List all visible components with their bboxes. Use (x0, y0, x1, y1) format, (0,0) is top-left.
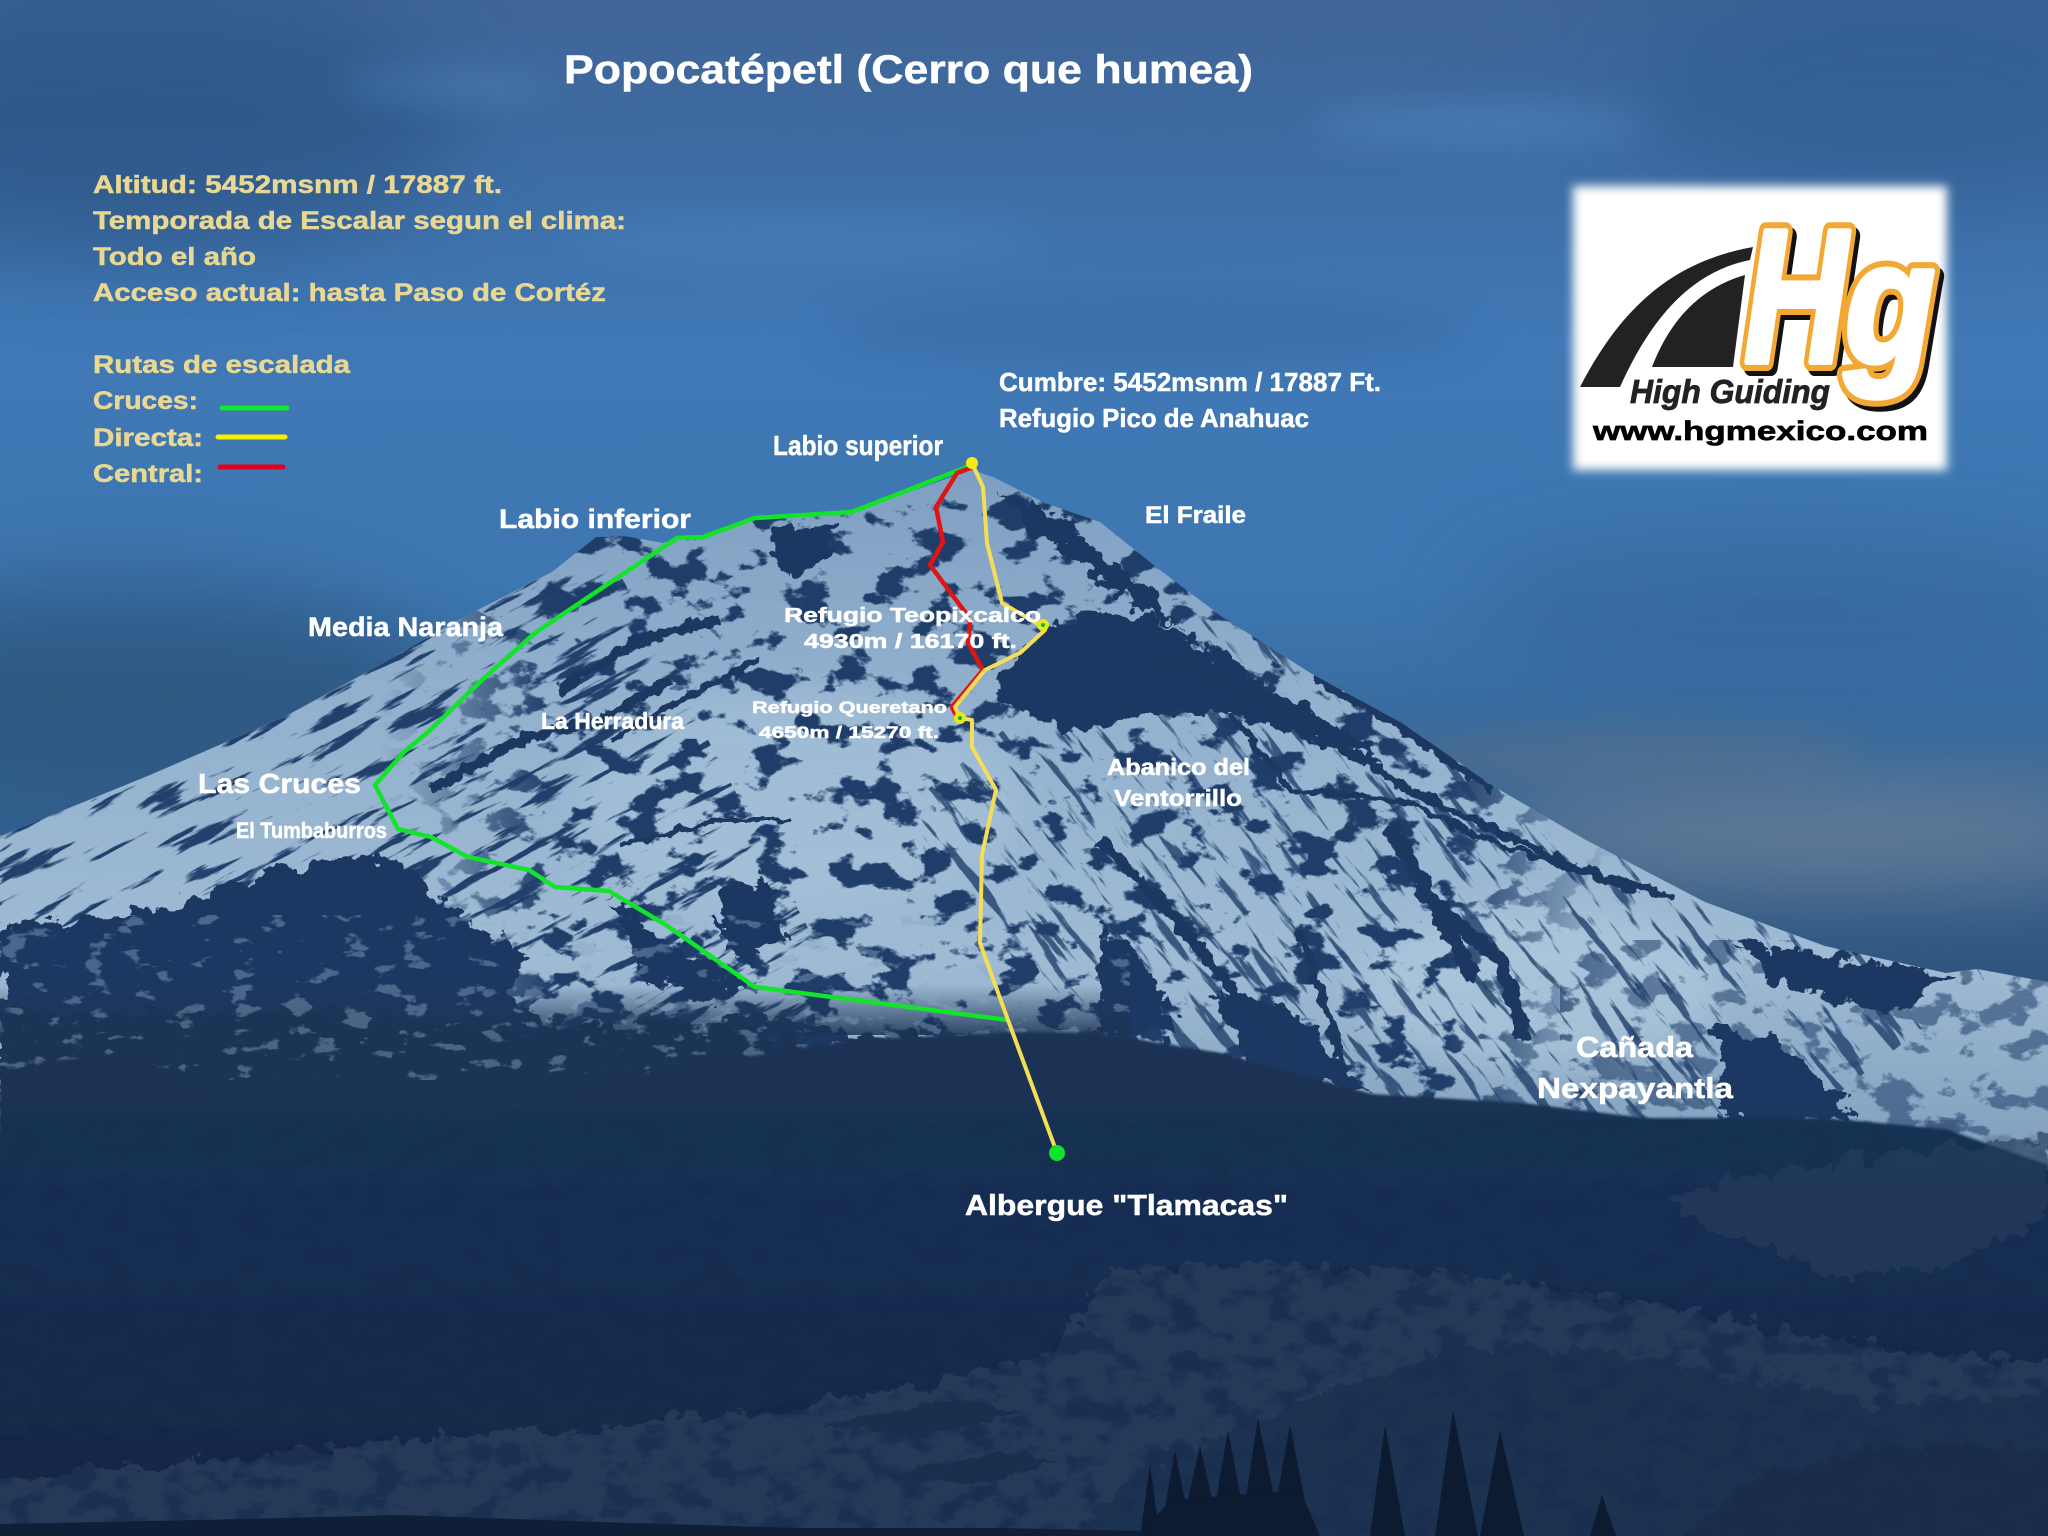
info block: altitude, season and access: Temporada de Escalar segun el clima: (93, 207, 626, 235)
forest band over the meadow (1030, 1345, 2048, 1536)
label: Refugio Teopixcalco (784, 605, 1041, 653)
foreground: forested hills (0, 1032, 2048, 1536)
rock texture: right slope (914, 610, 1984, 1119)
marker: summit (966, 457, 978, 469)
label: El Fraile: El Fraile (1145, 502, 1246, 529)
marker: Refugio Teopixcalco (1037, 619, 1049, 631)
forest grain (0, 1120, 2048, 1536)
marker: Albergue Tlamacas (1049, 1145, 1065, 1161)
label: Las Cruces: Las Cruces (198, 768, 361, 799)
info block: altitude, season and access: Acceso actual: hasta Paso de Cortéz (93, 279, 606, 307)
label: Abanico del Ventorrillo (1107, 754, 1250, 811)
label: Albergue Tlamacas: Albergue "Tlamacas" (965, 1190, 1288, 1222)
label: La Herradura: La Herradura (541, 708, 684, 734)
light flecks on the dark base (0, 915, 1130, 1080)
label: Cañada Nexpayantla: Nexpayantla (1537, 1073, 1734, 1105)
label: summit: Cumbre: 5452msnm / 17887 Ft. (999, 367, 1381, 397)
label: Labio superior: Labio superior (773, 430, 943, 461)
logo: High Guiding: H (1748, 196, 1854, 408)
label: Refugio Teopixcalco: 4930m / 16170 ft. (804, 631, 1017, 653)
logo: High Guiding: g (1844, 207, 1935, 399)
route: Directa (yellow) (955, 463, 1057, 1153)
legend: climbing routes: Directa: (93, 424, 203, 452)
label: Refugio Queretano: 4650m / 15270 ft. (759, 723, 939, 742)
label: Refugio Teopixcalco: Refugio Teopixcalco (784, 605, 1041, 627)
label: Cañada Nexpayantla: Cañada (1576, 1032, 1694, 1064)
logo: High Guiding: g (1848, 212, 1939, 404)
label: summit (999, 367, 1381, 433)
logo: High Guiding: High Guiding (1630, 373, 1830, 410)
info block: altitude, season and access: Altitud: 5452msnm / 17887 ft. (93, 171, 502, 199)
mountain: Popocatépetl snow slopes (0, 470, 2048, 1170)
label: Abanico del Ventorrillo: Abanico del (1107, 754, 1250, 780)
long ridge bands on east slope (430, 620, 1674, 1060)
label: Abanico del Ventorrillo: Ventorrillo (1114, 785, 1242, 811)
meadow: lower slopes (0, 1264, 2048, 1536)
shaded foot of the mountain (0, 985, 1130, 1035)
logo: High Guiding: H (1744, 191, 1850, 403)
label: Labio inferior: Labio inferior (499, 504, 692, 534)
legend: climbing routes: Rutas de escalada (93, 351, 351, 379)
label: El Tumbaburros: El Tumbaburros (236, 818, 387, 843)
rock texture: left slope (0, 570, 853, 1110)
marker: Refugio Queretano (954, 712, 966, 724)
legend: climbing routes: Cruces: (93, 387, 198, 415)
title: Popocatépetl (Cerro que humea) (564, 48, 1253, 92)
rock texture: centre face (391, 490, 1609, 1109)
legend: climbing routes: Central: (93, 460, 203, 488)
label: Refugio Queretano (752, 698, 947, 742)
legend: climbing routes (93, 351, 351, 488)
label: Refugio Queretano: Refugio Queretano (752, 698, 947, 717)
route: Central (red) (930, 468, 983, 717)
logo: High Guiding: www.hgmexico.com (1592, 416, 1928, 446)
label: Media Naranja: Media Naranja (308, 612, 504, 642)
info block: altitude, season and access: Todo el año (93, 243, 256, 271)
route: Cruces (green) (375, 465, 1008, 1020)
label: summit: Refugio Pico de Anahuac (999, 403, 1309, 433)
logo: High Guiding: H (1744, 191, 1850, 403)
logo: High Guiding (1573, 186, 1947, 470)
label: Cañada Nexpayantla (1537, 1032, 1734, 1105)
trees over the meadow (0, 1260, 2048, 1536)
foreground tree silhouettes (1140, 1410, 1616, 1536)
info block: altitude, season and access (93, 171, 626, 307)
logo: High Guiding: g (1844, 207, 1935, 399)
dark rock masses (0, 487, 1958, 1180)
meadow: upper right (1668, 1136, 2048, 1275)
